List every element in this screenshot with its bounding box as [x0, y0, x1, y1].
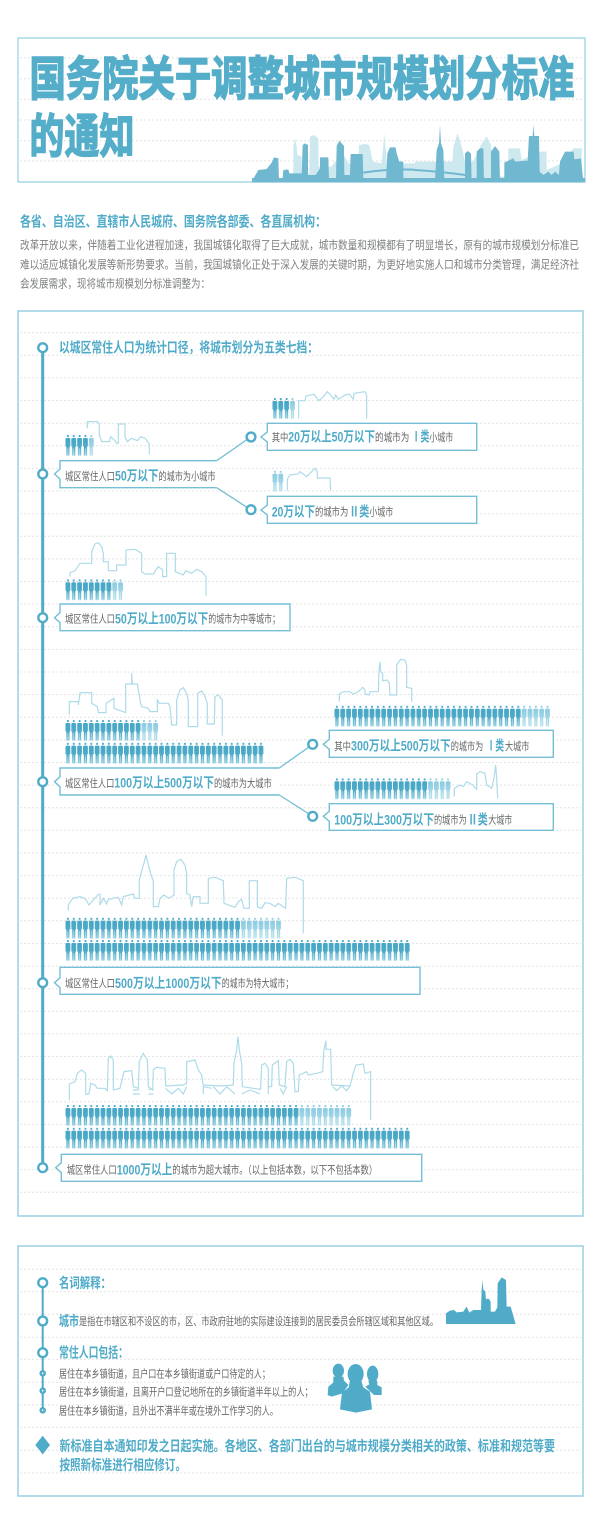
heading: resident population: 常住人口包括：: [59, 1344, 128, 1360]
skyline outline: [299, 392, 367, 418]
callout text: 城区常住人口: [67, 1162, 117, 1176]
callout text: 城区常住人口: [65, 976, 115, 990]
tier: 200k to 500k class I small city: [247, 392, 477, 450]
callout text: Ⅱ类: [468, 811, 488, 827]
callout: [261, 496, 477, 523]
callout text: 大城市: [488, 812, 512, 826]
people row: [334, 706, 550, 727]
icon: group of people: [328, 1364, 382, 1413]
icon: skyline: [446, 1277, 516, 1324]
resident population list: 居住在本乡镇街道，且外出不满半年或在境外工作学习的人。: [59, 1404, 278, 1418]
callout text: 500万以上1000万以下: [115, 975, 222, 991]
callout: [323, 730, 553, 757]
callout with branches: [54, 768, 279, 795]
callout text: 的城市为: [315, 504, 348, 518]
closing note: [60, 1438, 555, 1473]
node: [308, 812, 317, 821]
callout text: [65, 468, 216, 484]
skyline outline: [87, 422, 149, 454]
panel heading: 以城区常住人口为统计口径，将城市划分为五类七档：: [59, 340, 318, 356]
people rows: [65, 1105, 410, 1149]
people row: [272, 398, 295, 419]
resident population list: 居住在本乡镇街道，且离开户口登记地所在的乡镇街道半年以上的人；: [59, 1384, 313, 1398]
intro paragraph: [20, 238, 579, 290]
node: [308, 740, 317, 749]
node: [247, 505, 255, 514]
resident population list: [59, 1366, 313, 1418]
callout: [323, 804, 553, 830]
people rows: [65, 918, 410, 961]
tier: under 500k small city: [54, 422, 251, 510]
people rows: [65, 720, 264, 764]
callout text: 的城市为小城市: [158, 469, 216, 483]
callout text: 300万以上500万以下: [351, 738, 451, 754]
people row: [272, 471, 284, 492]
callout text: Ⅰ类: [487, 738, 504, 754]
callout text: 的城市为特大城市；: [222, 976, 293, 990]
callout text: 的城市为中等城市；: [208, 612, 280, 626]
node: [247, 433, 255, 441]
panel: term definitions: [18, 1246, 583, 1496]
tier: 3m to 5m class I large city: [308, 659, 553, 757]
resident population list: 居住在本乡镇街道，且户口在本乡镇街道或户口待定的人；: [59, 1366, 270, 1380]
callout: [261, 423, 477, 450]
intro paragraph: 会发展需求，现将城市规模划分标准调整为：: [20, 276, 210, 290]
callout: [54, 967, 420, 994]
skyline outline: [339, 659, 412, 702]
title panel: [18, 38, 585, 182]
callout text: [272, 503, 393, 519]
callout text: [65, 610, 280, 626]
tier: super city: [56, 1037, 422, 1181]
people row: [334, 778, 451, 799]
callout text: 20万以下: [272, 503, 315, 519]
skyline outline: [69, 1037, 371, 1120]
people row: [65, 579, 124, 600]
people row: [65, 435, 94, 456]
definition: city: [59, 1313, 438, 1329]
callout text: [65, 775, 272, 791]
intro heading: 各省、自治区、直辖市人民城府、国务院各部委、各直属机构：: [20, 214, 326, 230]
callout text: [65, 975, 293, 991]
callout text: 其中: [272, 431, 288, 444]
heading: terms: 名词解释：: [59, 1275, 111, 1291]
callout: [56, 1154, 422, 1181]
skyline outline: [454, 765, 498, 798]
skyline outline: [70, 543, 206, 596]
callout text: 城区常住人口: [65, 469, 115, 483]
tier: megacity: [54, 855, 420, 994]
callout text: 城区常住人口: [65, 776, 114, 790]
callout text: 的城市为大城市: [214, 776, 272, 790]
callout text: 的城市为超大城市。（以上包括本数，以下不包括本数）: [172, 1162, 377, 1176]
skyline outline: [287, 468, 331, 491]
panel: city classification: [18, 311, 583, 1216]
callout text: 100万以上300万以下: [334, 811, 434, 827]
tier: under 200k class II small city: [247, 468, 477, 523]
callout text: 20万以上50万以下: [288, 429, 375, 445]
callout text: 小城市: [429, 430, 453, 444]
callout text: 50万以下: [115, 468, 158, 484]
callout text: 小城市: [369, 504, 393, 518]
callout: [54, 604, 290, 631]
icon: diamond: [35, 1436, 50, 1454]
callout text: 50万以上100万以下: [115, 610, 208, 626]
callout text: 城区常住人口: [65, 612, 115, 626]
timeline: [38, 1278, 47, 1412]
callout text: 100万以上500万以下: [114, 775, 214, 791]
tier: 1m to 3m class II large city: [308, 765, 553, 830]
callout text: 其中: [334, 740, 351, 753]
closing note: 按照新标准进行相应修订。: [60, 1457, 186, 1473]
title text: [30, 52, 574, 163]
callout text: 的城市为: [451, 739, 483, 753]
definition: city: 城市: [59, 1313, 79, 1329]
callout text: [272, 429, 453, 445]
tier: medium city: [54, 543, 290, 631]
callout text: 1000万以上: [117, 1161, 172, 1177]
skyline outline: [68, 855, 303, 933]
tier: large city: [54, 673, 313, 816]
callout text: 的城市为: [434, 812, 467, 826]
skyline outline: [69, 673, 222, 736]
title text: 的通知: [30, 110, 134, 163]
icon: title skyline: [252, 125, 585, 182]
timeline: [38, 343, 47, 1172]
callout text: Ⅰ类: [412, 429, 429, 445]
definition: city: 是指在市辖区和不设区的市，区、市政府驻地的实际建设连接到的居民委员会所辖区域和其他区域。: [79, 1314, 438, 1328]
callout text: [334, 738, 529, 754]
callout text: Ⅱ类: [349, 503, 369, 519]
callout with branches: [54, 461, 217, 488]
callout text: 的城市为: [375, 430, 409, 444]
callout text: 大城市: [505, 739, 529, 753]
callout text: [67, 1161, 377, 1177]
